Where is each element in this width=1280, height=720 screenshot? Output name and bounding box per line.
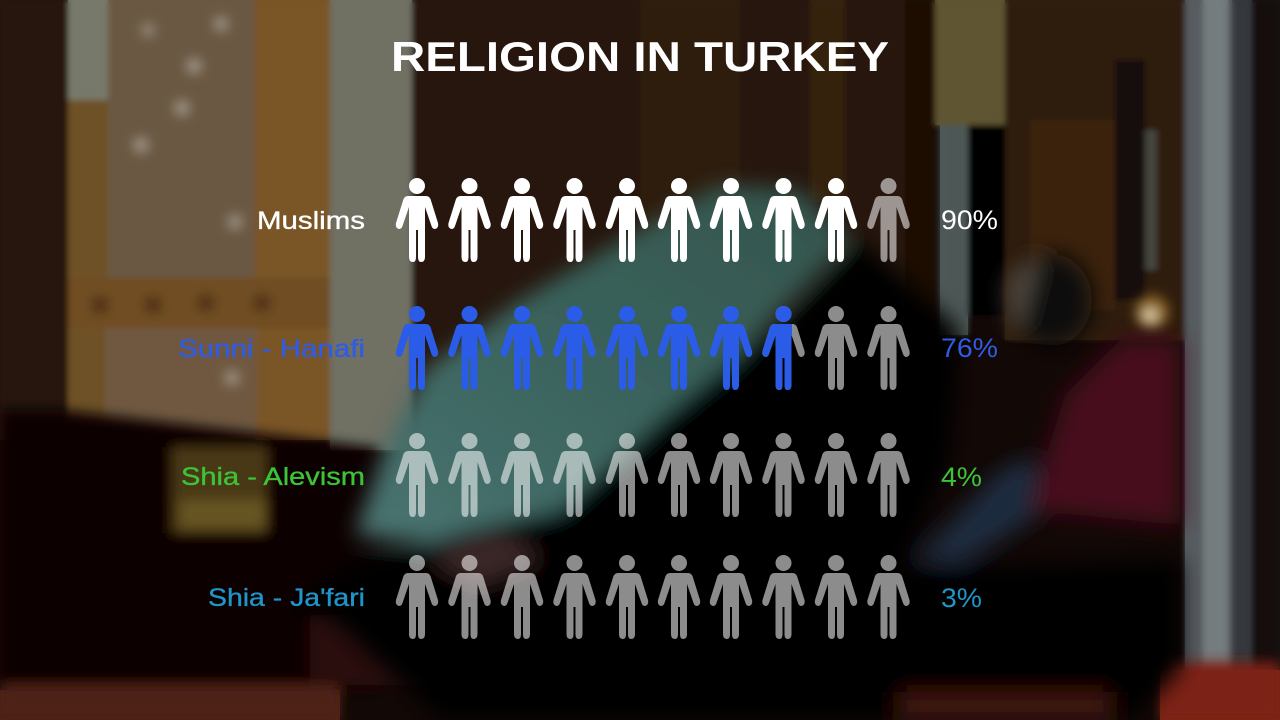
row: Muslims 90%	[257, 178, 998, 262]
value: 3%: 3%	[941, 583, 982, 613]
pictogram: 0.4 of 10 green	[396, 433, 910, 517]
pictogram: 0.3 of 10 cyan	[396, 555, 910, 639]
pictogram: 7.6 of 10 blue	[396, 306, 910, 390]
value: 76%: 76%	[941, 333, 998, 363]
value: 90%: 90%	[941, 205, 998, 235]
label: Shia - Alevism: Shia - Alevism	[181, 463, 365, 491]
title: RELIGION IN TURKEY	[391, 33, 889, 80]
value: 4%: 4%	[941, 462, 982, 492]
row: Sunni - Hanafi 76%	[178, 306, 998, 390]
row: Shia - Alevism 4%	[181, 433, 982, 517]
label: Shia - Ja'fari: Shia - Ja'fari	[208, 584, 365, 612]
label: Muslims: Muslims	[257, 207, 365, 235]
pictogram: 9 of 10 white	[396, 178, 910, 262]
row: Shia - Ja'fari 3%	[208, 555, 982, 639]
label: Sunni - Hanafi: Sunni - Hanafi	[178, 335, 365, 363]
